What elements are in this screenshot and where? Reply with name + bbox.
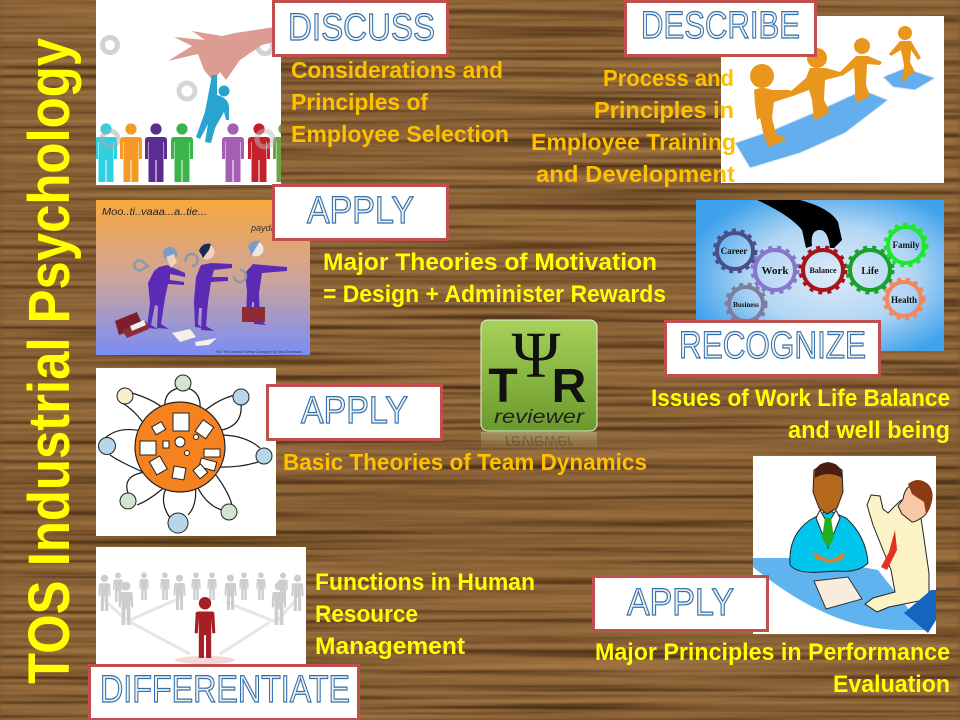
heading: apply: APPLY	[627, 582, 734, 624]
heading: apply	[274, 186, 448, 240]
panel: work life balance	[651, 200, 950, 444]
heading: apply	[268, 386, 442, 440]
logo: TIR reviewer	[481, 319, 597, 452]
text: process and principles: Process and	[603, 65, 734, 91]
image: gears of balance: Life	[861, 266, 879, 277]
text: process and principles: Employee Training	[531, 129, 736, 155]
text: functions: Resource	[315, 601, 418, 628]
text: performance evaluation: Major Principles in Performance	[595, 639, 950, 666]
image: figures on puzzle	[721, 16, 944, 183]
text: work life balance: Issues of Work Life Balance	[651, 385, 950, 412]
logo: TIR reviewer: T	[488, 360, 518, 413]
text: functions: Management	[315, 633, 465, 660]
text: performance evaluation: Evaluation	[833, 671, 950, 698]
image: network of people	[96, 547, 306, 664]
heading: describe: DESCRIBE	[641, 5, 800, 47]
text: functions: Functions in Human	[315, 569, 535, 596]
text: work life balance: and well being	[788, 417, 950, 444]
text: theories of motivation: = Design + Administer Rewards	[323, 281, 666, 308]
panel: performance evaluation	[594, 456, 950, 698]
logo: TIR reviewer: reviewer	[494, 407, 585, 428]
text: functions	[315, 569, 535, 660]
image: wind-up workers cartoon: For 'The Common Sense Company' by Stan Groenland	[216, 350, 302, 354]
text: considerations: Considerations and	[291, 57, 503, 83]
image: gears of balance: Balance	[809, 266, 837, 275]
image: gears of balance: Career	[721, 246, 747, 256]
image: gears of balance: Family	[892, 240, 920, 250]
panel: employee selection	[95, 0, 509, 185]
heading: apply	[594, 576, 768, 630]
heading: differentiate: DIFFERENTIATE	[100, 669, 350, 711]
logo: TIR reviewer: reviewer	[505, 432, 574, 452]
heading: discuss: DISCUSS	[288, 7, 435, 49]
image: two men at table	[753, 456, 936, 634]
heading: discuss	[274, 2, 448, 56]
text: considerations: Principles of	[291, 89, 428, 115]
logo: TIR reviewer: R	[552, 360, 586, 413]
panel: team dynamics	[96, 368, 647, 536]
heading: apply: APPLY	[301, 390, 408, 432]
heading: recognize	[666, 322, 880, 376]
image: team around table	[96, 368, 276, 536]
text: team dynamics: Basic Theories of Team Dynamics	[283, 449, 647, 475]
heading: describe	[626, 2, 816, 56]
text: process and principles	[531, 65, 736, 187]
image: gears of balance: Health	[891, 295, 917, 305]
text: theories of motivation	[323, 249, 666, 308]
text: theories of motivation: Major Theories of Motivation	[323, 249, 657, 276]
image: gears of balance: Business	[733, 301, 759, 309]
image: hand picking employee	[95, 0, 295, 185]
image: wind-up workers cartoon	[96, 200, 310, 355]
logo: TIR reviewer: Ψ	[512, 319, 561, 392]
text: considerations	[291, 57, 509, 147]
panel: training and development	[531, 2, 944, 187]
text: work life balance	[651, 385, 950, 444]
panel: human resource management	[90, 547, 535, 720]
image: gears of balance: Work	[762, 265, 789, 277]
image: gears of balance	[696, 200, 944, 351]
text: performance evaluation	[595, 639, 950, 698]
heading: differentiate	[90, 666, 358, 720]
text: process and principles: Principles in	[594, 97, 734, 123]
image: wind-up workers cartoon: Moo..ti..vaaa...a..tie...	[102, 206, 207, 218]
text: considerations: Employee Selection	[291, 121, 509, 147]
text: process and principles: and Development	[536, 161, 735, 187]
heading: recognize: RECOGNIZE	[679, 325, 866, 367]
image: wind-up workers cartoon: payda	[250, 223, 276, 233]
panel: motivation	[96, 186, 666, 355]
heading: apply: APPLY	[307, 190, 414, 232]
